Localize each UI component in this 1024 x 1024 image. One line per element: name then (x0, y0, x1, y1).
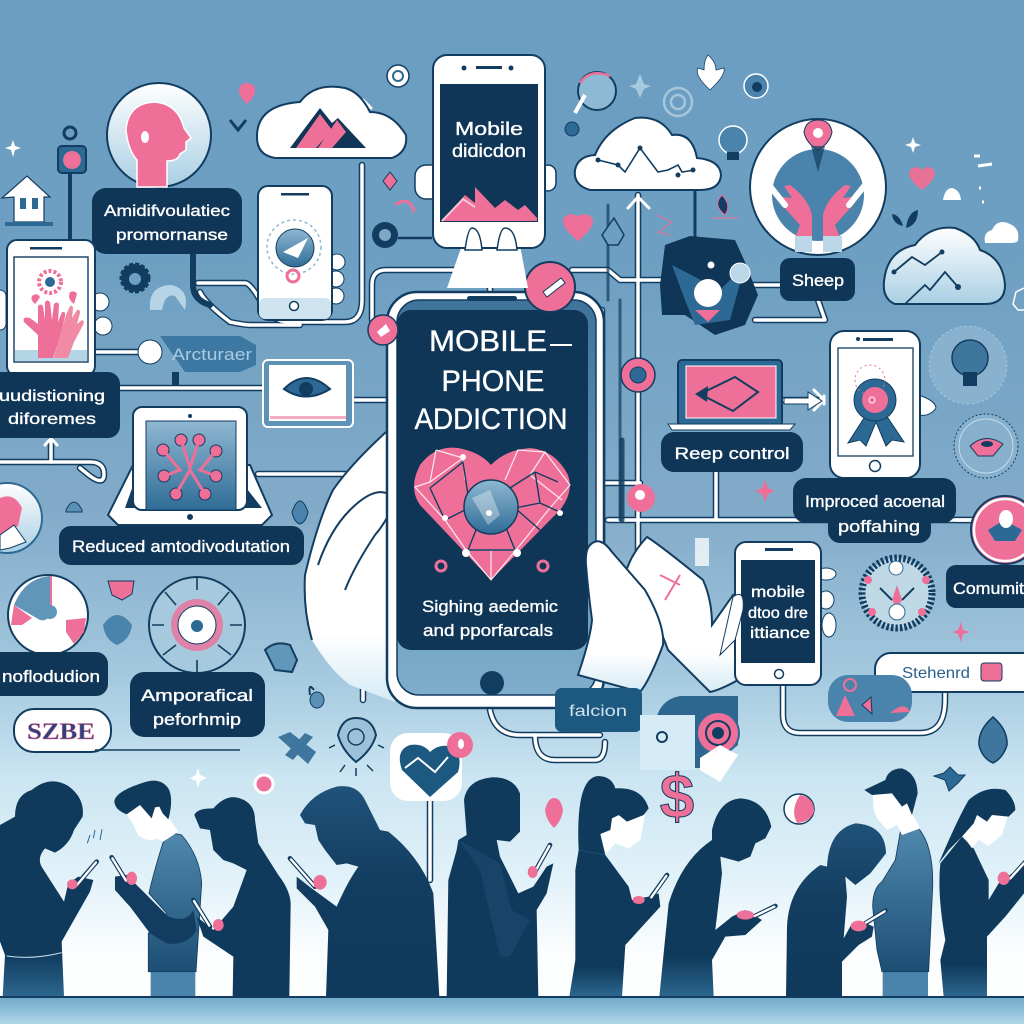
icon: padlock (744, 74, 768, 98)
icon: magnifier (565, 72, 616, 136)
title: ADDICTION (414, 403, 568, 436)
label: amporafical peforhmip: Amporafical (141, 687, 253, 705)
label: audistioning diforemes: diforemes (8, 411, 96, 428)
icon: leaf sprig (892, 210, 918, 228)
label: audistioning diforemes: uudistioning (0, 388, 105, 405)
icon: ring top (387, 65, 409, 87)
screen caption: and pporfarcals (423, 621, 553, 640)
label: amidifvoulatiec promornanse (92, 188, 242, 254)
title: MOBILE (429, 325, 547, 358)
label: reep control (661, 432, 803, 472)
icon: dark star (934, 767, 965, 791)
top phone: didicdon (452, 141, 526, 161)
panel: tablet with network (108, 407, 272, 525)
person 1 (0, 781, 102, 997)
title: PHONE (442, 365, 544, 398)
panel: eye screen (263, 360, 353, 427)
icon: head profile circle (107, 83, 211, 187)
icon: heart badge (390, 732, 473, 801)
icon: hexagon outline (1013, 288, 1024, 310)
icon: dark gear (121, 264, 149, 292)
icon: sparkle (5, 140, 21, 157)
icon: half moon orb (784, 794, 814, 824)
icon: crossed tools (278, 732, 316, 764)
icon: arrow leaf (602, 218, 624, 245)
dark screen (397, 310, 588, 650)
icon: bulb (719, 126, 747, 160)
icon: pink coin (255, 775, 273, 793)
icon: location tag (58, 127, 86, 173)
cloud: small mid (943, 188, 961, 200)
icon: dashes (974, 156, 992, 202)
label: noflodudion: noflodudion (2, 667, 100, 686)
label: improced acoenal poffahing: Improced acoenal (805, 492, 945, 511)
icon: small sparkle pink (755, 480, 775, 502)
main hand: right (578, 537, 743, 692)
icon: hands in circle with pin (750, 119, 886, 255)
network heart (414, 448, 570, 580)
icon: white node (138, 340, 162, 364)
silhouettes: people on phones (0, 777, 553, 997)
label: noflodudion (0, 652, 108, 696)
icon: clipped circle left (0, 483, 42, 553)
person 9 (851, 768, 933, 997)
label: audistioning diforemes (0, 372, 120, 438)
cloud: trend chart (575, 118, 721, 190)
icon: location ray pin (329, 718, 384, 776)
title (414, 325, 568, 436)
icon: sparkle mid lower (190, 768, 207, 788)
pink badge: ring node (621, 358, 655, 392)
icon: sparkle top (629, 74, 651, 98)
person 10 (939, 789, 1024, 997)
label: amidifvoulatiec promornanse: promornanse (116, 227, 228, 244)
label: improced acoenal poffahing (793, 478, 956, 543)
icon: badge chip (265, 643, 297, 672)
icon: dial (372, 222, 432, 248)
label: improced acoenal poffahing: poffahing (838, 517, 920, 536)
label: stehenrd pill: Stehenrd (902, 665, 970, 682)
phone: mobile dtoo dre ittiance: ittiance (750, 625, 810, 642)
pink badge: left (368, 315, 398, 345)
connector lines (0, 100, 975, 880)
icon: small cloud tag (828, 675, 912, 722)
icon: camera target (640, 696, 739, 782)
icon: plant (712, 195, 738, 218)
screen caption (422, 597, 559, 640)
person 6 (569, 776, 667, 997)
icon: house (2, 176, 53, 226)
top phone: Mobile (455, 119, 523, 139)
label: stehenrd pill (875, 653, 1024, 692)
pink badge: lower node (627, 484, 655, 512)
icon: small key (310, 687, 324, 708)
icon: small diamond (383, 172, 397, 190)
label: comumit (946, 565, 1024, 608)
label: reduced amtodivodutation: Reduced amtodivodutation (72, 537, 290, 556)
phone: ribbon award (830, 331, 936, 478)
label: arcturaer banner: Arcturaer (172, 345, 252, 364)
icon: pink pin (545, 798, 563, 828)
icon: cloud with mountains (257, 87, 406, 158)
label: falcion tab: falcion (569, 703, 627, 720)
person 5 (447, 777, 553, 997)
icon: small bars (695, 538, 709, 566)
icon: leaf (979, 717, 1007, 763)
icon: small cross (952, 622, 970, 642)
icon: white heart top (697, 55, 724, 90)
pink badge: top connector (525, 262, 575, 312)
icon: pink pin (239, 83, 255, 104)
icon: arcs (395, 201, 414, 212)
cloud: small top right (985, 222, 1018, 243)
icon: speech drop (103, 615, 132, 645)
icon: small drop (292, 501, 308, 524)
icon: small bag (66, 502, 82, 512)
icon: sparkle right (905, 137, 921, 153)
icon: dark flower with network (660, 236, 758, 335)
phone: middle connected app (258, 186, 345, 320)
icon: dollar sign: $ (660, 763, 694, 832)
main phone (387, 292, 604, 708)
label: szbe pill (14, 709, 240, 752)
label: reep control: Reep control (674, 444, 790, 463)
cloud: right with chart (884, 228, 1005, 304)
icon: bulb in dotted ring (929, 326, 1007, 404)
panel: laptop with diagram (668, 360, 795, 430)
icon: swirl (664, 88, 692, 116)
icon: pink eye ring (954, 414, 1018, 478)
label: amporafical peforhmip: peforhmip (153, 711, 241, 729)
icon: check mark (230, 120, 246, 130)
screen caption: Sighing aedemic (422, 597, 559, 616)
icon: small heart (909, 167, 935, 190)
phone: mobile dtoo dre ittiance: mobile (751, 584, 805, 601)
person 3 (193, 797, 291, 997)
main hand: left (305, 432, 395, 702)
arrow: laptop to phone (784, 392, 822, 410)
label: arcturaer banner (160, 336, 256, 386)
icon: radial burst (149, 577, 245, 673)
label: falcion tab (555, 688, 642, 732)
label: sheep (780, 258, 855, 301)
label: sheep: Sheep (792, 271, 844, 290)
icon: pie dial (8, 575, 88, 655)
label: amidifvoulatiec promornanse: Amidifvoulatiec (104, 203, 230, 220)
label: amporafical peforhmip (130, 672, 265, 737)
label: reduced amtodivodutation (59, 526, 304, 565)
top phone (415, 55, 556, 288)
phone: mobile dtoo dre ittiance: dtoo dre (748, 605, 808, 622)
person 2 (112, 781, 202, 997)
person 8 (786, 823, 886, 997)
icon: apple heart (563, 214, 593, 241)
phone: mobile dtoo dre ittiance (720, 542, 836, 685)
icon: pink scribble (656, 215, 672, 235)
phone: left hands (0, 240, 112, 376)
label: szbe pill: SZBE (27, 719, 95, 744)
icon: gear face (862, 558, 932, 628)
icon: pink person circle (971, 496, 1024, 564)
person 4 (290, 786, 439, 997)
icon: pale swirl (150, 285, 186, 310)
floor band (0, 996, 1024, 1024)
label: comumit: Comumit (953, 579, 1024, 598)
icon: pink tag (108, 581, 134, 600)
person 7 (659, 798, 775, 997)
